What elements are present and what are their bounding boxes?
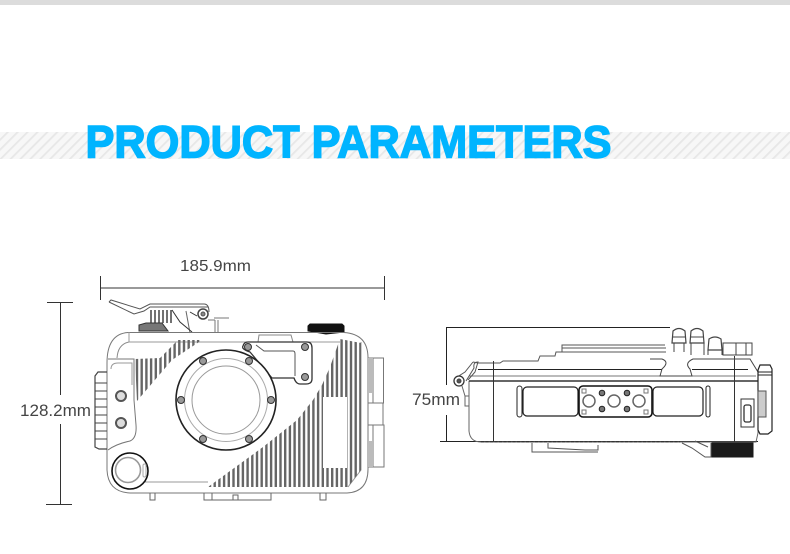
lens port xyxy=(176,350,276,450)
dimension: height 128.2mm xyxy=(20,302,91,504)
side latch window xyxy=(741,399,754,427)
top knobs xyxy=(672,328,752,355)
top plate lines xyxy=(562,348,666,352)
top grey bar xyxy=(0,0,790,5)
top lever and latch xyxy=(109,300,229,333)
dimension: depth 75mm: 75mm xyxy=(412,391,460,409)
bottom feet xyxy=(150,493,326,500)
side body outline xyxy=(473,345,665,363)
dimension: height 128.2mm: 128.2mm xyxy=(20,402,91,420)
bracket plate xyxy=(243,342,312,384)
lower-right fins xyxy=(210,330,360,490)
bottom mounts xyxy=(532,441,711,457)
dimension: depth 75mm xyxy=(412,328,758,442)
black top button xyxy=(308,324,344,334)
dimension: width 185.9mm: 185.9mm xyxy=(180,258,251,275)
black knurled wheel xyxy=(712,443,753,457)
round dial xyxy=(112,453,148,489)
striped title band xyxy=(0,132,790,159)
housing outline xyxy=(107,332,368,493)
side view of housing xyxy=(412,328,772,457)
bracket screws xyxy=(244,344,308,380)
hinge latch xyxy=(454,362,478,406)
left side panel with holes xyxy=(108,359,136,450)
top tab xyxy=(258,335,293,342)
fin cut-out xyxy=(323,397,347,468)
tripod mount plate xyxy=(579,386,652,417)
right side tabs xyxy=(368,358,384,467)
upper-left fins xyxy=(137,335,198,405)
front view of housing xyxy=(95,300,384,500)
dimension: width 185.9mm xyxy=(100,258,384,300)
title: PRODUCT PARAMETERS xyxy=(86,116,612,168)
left grip xyxy=(95,372,107,449)
right slots xyxy=(653,387,703,416)
left slots xyxy=(517,386,522,417)
right dial xyxy=(758,365,772,434)
